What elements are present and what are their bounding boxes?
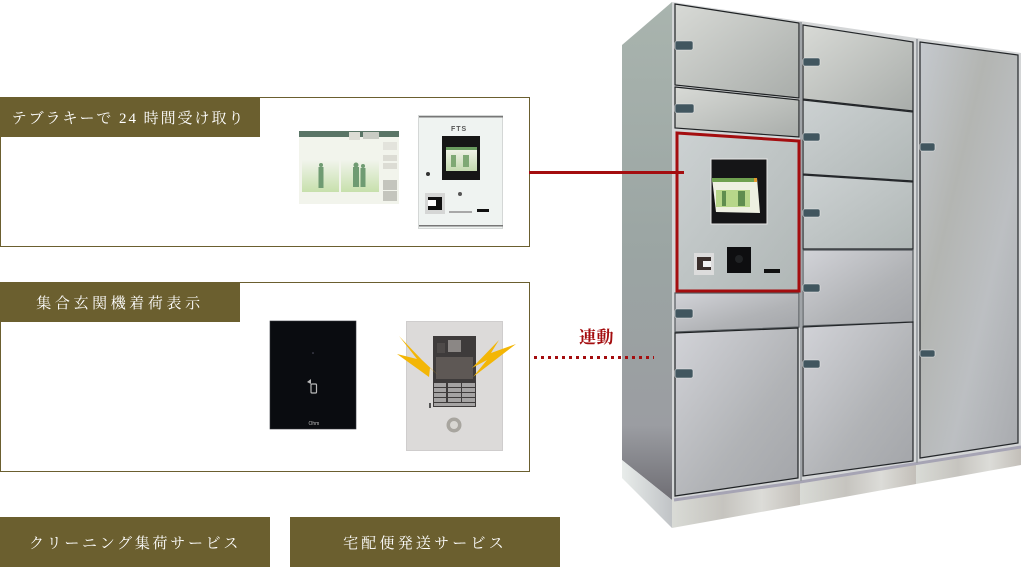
image: touch screen: [299, 131, 399, 204]
locker body frame: [672, 2, 1021, 500]
image: locker unit: [622, 2, 1021, 528]
image: black panel: [270, 321, 356, 429]
red highlight frame: [677, 133, 799, 291]
locker side: [622, 2, 672, 500]
column 1 doors: [675, 4, 799, 496]
image: FTS terminal: [418, 116, 503, 228]
button: parcel shipping service: [290, 517, 560, 567]
heading: entrance arrival display: 集合玄関機着荷表示: [36, 296, 204, 312]
card reader: [694, 253, 714, 275]
camera panel: [727, 247, 751, 273]
card slot: [764, 269, 780, 273]
heading: entrance arrival display: [0, 282, 240, 322]
locker plinth side: [622, 460, 672, 528]
icon: left lightning: [397, 336, 438, 377]
panel: 24-hour pickup: [0, 97, 530, 247]
connector line: red line to panel: [529, 171, 684, 174]
panel: entrance arrival display: [0, 282, 530, 472]
heading: 24-hour pickup: テブラキーで 24 時間受け取り: [12, 110, 245, 126]
button: parcel shipping service: 宅配便発送サービス: [343, 536, 507, 552]
locker handles: [675, 41, 935, 378]
button: cleaning collection service: クリーニング集荷サービス: [29, 536, 241, 552]
terminal screen: [711, 159, 767, 224]
label: linked: 連動: [579, 327, 614, 347]
column 2 doors: [803, 25, 913, 476]
image: entrance panel with alert: [397, 322, 516, 450]
column 3 door: [920, 42, 1018, 458]
heading: 24-hour pickup: [0, 97, 260, 137]
image: black panel: Ohm: [308, 421, 319, 427]
button: cleaning collection service: [0, 517, 270, 567]
connector: dotted red line: [534, 356, 654, 359]
locker plinth front: [672, 482, 800, 528]
image: FTS terminal: FTS: [451, 126, 467, 133]
icon: right lightning: [472, 340, 516, 377]
